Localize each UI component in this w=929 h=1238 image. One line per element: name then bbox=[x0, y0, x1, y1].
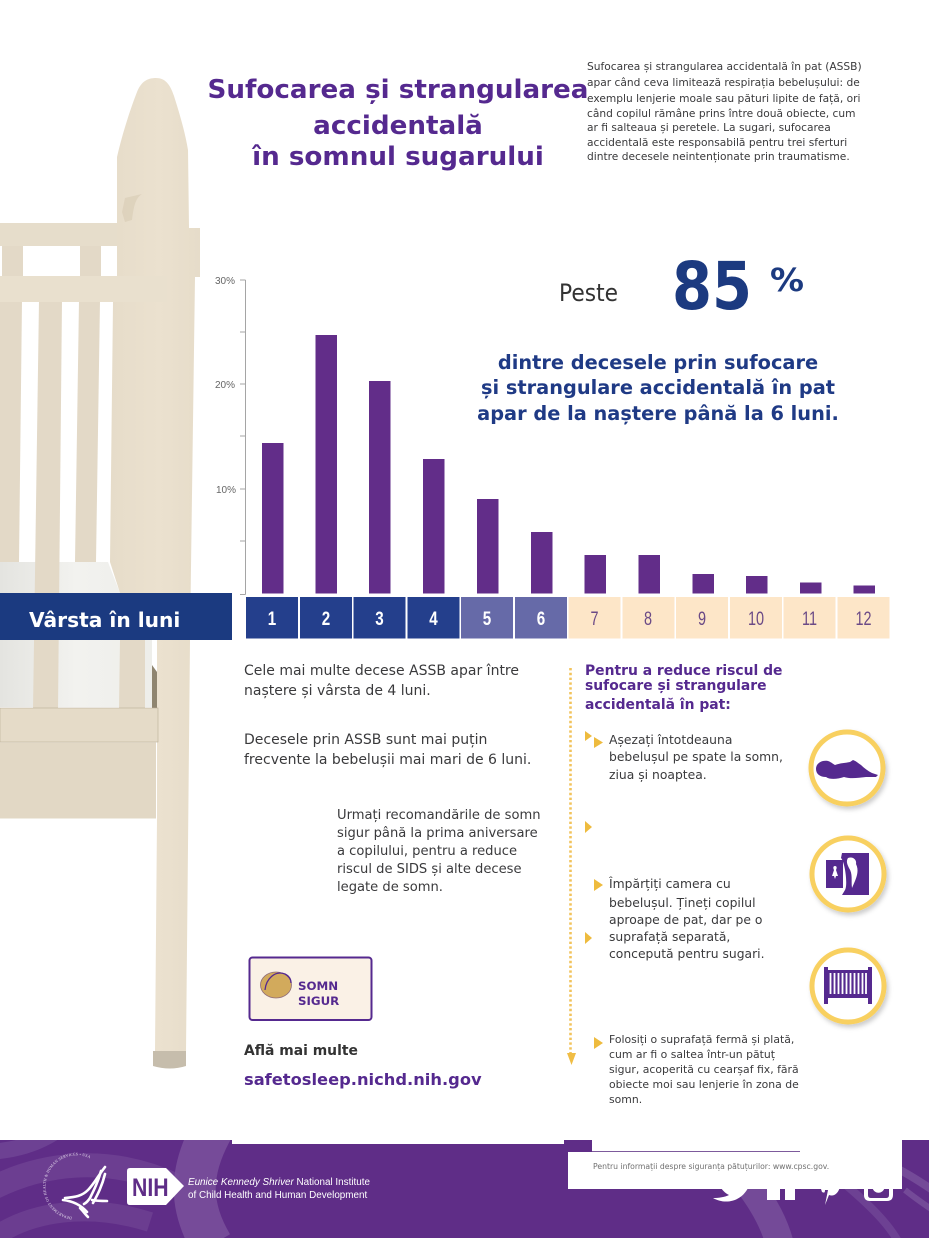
seal circular text: DEPARTMENT OF HEALTH & HUMAN SERVICES • USA bbox=[43, 1152, 90, 1220]
tip: share the room: suprafață separată, bbox=[609, 930, 730, 944]
text: deaths after 6 months: Decesele prin ASSB sunt mai puțin bbox=[244, 732, 487, 748]
crib foot bbox=[153, 1051, 186, 1068]
notice rule bbox=[592, 1150, 800, 1152]
crib middle rail bbox=[0, 276, 167, 302]
crib mattress bbox=[0, 562, 152, 707]
title: în somnul sugarului bbox=[251, 142, 544, 172]
text: deaths before 4 months: Cele mai multe decese ASSB apar între bbox=[244, 663, 519, 679]
y axis labels: 30% bbox=[215, 276, 235, 287]
text: safe sleep recommendation: riscul de SIDS și alte decese bbox=[337, 862, 522, 877]
white notice panel bbox=[568, 1130, 902, 1189]
tip: firm flat surface bbox=[609, 1033, 799, 1106]
text: deaths before 4 months bbox=[244, 663, 519, 699]
text: safe sleep recommendation: a copilului, pentru a reduce bbox=[337, 844, 517, 859]
institute name bbox=[188, 1177, 370, 1201]
month numbers: 8 bbox=[644, 608, 652, 630]
intro text: când copilul rămâne prins între două obiecte, cum bbox=[587, 107, 855, 120]
intro text: accidentală este responsabilă pentru trei sferturi bbox=[587, 136, 847, 149]
crib slats bbox=[0, 246, 145, 710]
month numbers: 7 bbox=[590, 608, 599, 630]
tip: back to sleep: Așezați întotdeauna bbox=[609, 733, 732, 747]
icon: facebook bbox=[767, 1186, 795, 1200]
y axis labels bbox=[215, 276, 236, 496]
logo: NIH: NIH bbox=[132, 1173, 169, 1201]
text: deaths after 6 months bbox=[244, 732, 531, 768]
tip: share the room: bebelușul. Țineți copilul bbox=[609, 896, 756, 910]
tip: firm flat surface: Folosiți o suprafață fermă și plată, bbox=[609, 1033, 794, 1046]
y axis labels: 20% bbox=[215, 380, 235, 391]
month cells bbox=[246, 597, 890, 638]
tip: firm flat surface: somn. bbox=[609, 1093, 642, 1106]
title: accidentală bbox=[313, 111, 483, 141]
logo text bbox=[298, 979, 339, 1008]
institute name: of Child Health and Human Development bbox=[188, 1190, 367, 1201]
icon: pinterest bbox=[820, 1186, 840, 1205]
icon: crib bbox=[812, 950, 884, 1022]
month numbers: 3 bbox=[375, 607, 384, 629]
tip: share the room: concepută pentru sugari. bbox=[609, 947, 765, 961]
age label: Vârsta în luni bbox=[29, 608, 180, 632]
footer background bbox=[0, 1140, 929, 1238]
month numbers: 12 bbox=[855, 608, 872, 630]
logo: HHS seal bbox=[43, 1152, 108, 1220]
title bbox=[208, 75, 588, 172]
intro text bbox=[587, 60, 862, 163]
percent sign: % bbox=[770, 261, 804, 299]
crib mattress shadow bbox=[152, 665, 157, 708]
statistic description: apar de la naștere până la 6 luni. bbox=[477, 402, 839, 425]
footer band bbox=[0, 1140, 929, 1238]
heading: reduce the risk: Pentru a reduce riscul de bbox=[585, 663, 782, 679]
crib base board bbox=[0, 742, 156, 818]
icon: baby on back bbox=[811, 732, 883, 804]
icon: twitter bbox=[713, 1186, 749, 1202]
icon: instagram bbox=[864, 1186, 893, 1201]
illustration: crib bbox=[0, 78, 200, 1068]
y axis labels: 10% bbox=[216, 485, 236, 496]
crib corner post and headboard bbox=[110, 78, 200, 1052]
statistic description bbox=[477, 351, 839, 425]
text: safe sleep recommendation: legate de somn. bbox=[337, 880, 443, 895]
crib lower rail bbox=[0, 708, 158, 742]
institute name: Eunice Kennedy Shriver National Institute bbox=[188, 1177, 370, 1188]
notice text: Pentru informații despre siguranța pătuțurilor: www.cpsc.gov. bbox=[593, 1162, 829, 1172]
heading: reduce the risk bbox=[585, 663, 782, 713]
tip: firm flat surface: cum ar fi o saltea într-un pătuț bbox=[609, 1048, 775, 1061]
bars bbox=[262, 335, 875, 594]
intro text: apar când ceva limitează respirația bebelușului: de bbox=[587, 76, 860, 89]
icon: moon oval bbox=[260, 972, 292, 998]
statistic description: dintre decesele prin sufocare bbox=[498, 351, 818, 374]
tip: share the room bbox=[608, 876, 765, 961]
tip: share the room: Împărțiți camera cu bbox=[608, 876, 731, 891]
month numbers: 1 bbox=[268, 607, 277, 629]
icon: shared room bbox=[812, 838, 884, 910]
logo: NIH bbox=[127, 1168, 184, 1205]
crib headboard shading bbox=[122, 194, 142, 222]
tip: back to sleep: ziua și noaptea. bbox=[609, 768, 707, 782]
logo text: SIGUR bbox=[298, 994, 339, 1008]
number: 85: 85 bbox=[672, 248, 752, 325]
month numbers: 10 bbox=[748, 608, 764, 630]
heading: reduce the risk: accidentală în pat: bbox=[585, 697, 731, 713]
heading: reduce the risk: sufocare și strangulare bbox=[585, 678, 767, 694]
label: peste: Peste bbox=[559, 279, 618, 307]
text: deaths after 6 months: frecvente la bebelușii mai mari de 6 luni. bbox=[244, 752, 531, 768]
month numbers: 2 bbox=[322, 607, 330, 629]
text: deaths before 4 months: naștere și vârsta de 4 luni. bbox=[244, 683, 431, 699]
text: learn more: Află mai multe bbox=[244, 1043, 358, 1059]
tip: back to sleep bbox=[609, 733, 783, 782]
tip: back to sleep: bebelușul pe spate la somn, bbox=[609, 750, 783, 764]
logo: safe sleep bbox=[250, 958, 372, 1020]
month numbers: 9 bbox=[698, 608, 706, 630]
text: safe sleep recommendation: Urmați recomandările de somn bbox=[337, 808, 541, 823]
intro text: exemplu lenjerie moale sau pături lipite de față, ori bbox=[587, 92, 860, 105]
tip: firm flat surface: obiecte moi sau lenjerie în zona de bbox=[609, 1078, 799, 1091]
intro text: Sufocarea și strangularea accidentală în pat (ASSB) bbox=[587, 60, 862, 73]
link: website: safetosleep.nichd.nih.gov bbox=[244, 1070, 482, 1089]
social icons bbox=[713, 1186, 893, 1205]
arrow: dotted timeline bbox=[567, 668, 576, 1065]
month numbers: 11 bbox=[802, 608, 817, 630]
text: safe sleep recommendation bbox=[337, 808, 541, 895]
age label bbox=[0, 593, 232, 640]
crib top rail bbox=[0, 223, 117, 246]
chart axis bbox=[240, 280, 246, 594]
month numbers bbox=[268, 607, 872, 630]
intro text: dintre decesele neintenționate prin traumatisme. bbox=[587, 150, 850, 163]
title: Sufocarea și strangularea bbox=[208, 75, 588, 105]
month scale bbox=[246, 597, 890, 638]
month numbers: 4 bbox=[429, 607, 438, 629]
statistic description: și strangulare accidentală în pat bbox=[481, 376, 835, 399]
intro text: ar fi salteaua și peretele. La sugari, sufocarea bbox=[587, 121, 831, 134]
bar chart bbox=[215, 276, 875, 594]
tip: share the room: aproape de pat, dar pe o bbox=[609, 913, 762, 927]
month numbers: 6 bbox=[537, 607, 545, 629]
tip: firm flat surface: sigur, acoperită cu cearșaf fix, fără bbox=[609, 1063, 799, 1076]
text: safe sleep recommendation: sigur până la prima aniversare bbox=[337, 826, 538, 841]
footer swirls bbox=[0, 1130, 929, 1238]
seal eagle bbox=[63, 1167, 107, 1217]
bullet markers bbox=[585, 731, 603, 1049]
logo text: SOMN bbox=[298, 979, 338, 993]
month numbers: 5 bbox=[483, 607, 492, 629]
statistic: 85 percent bbox=[477, 248, 839, 425]
